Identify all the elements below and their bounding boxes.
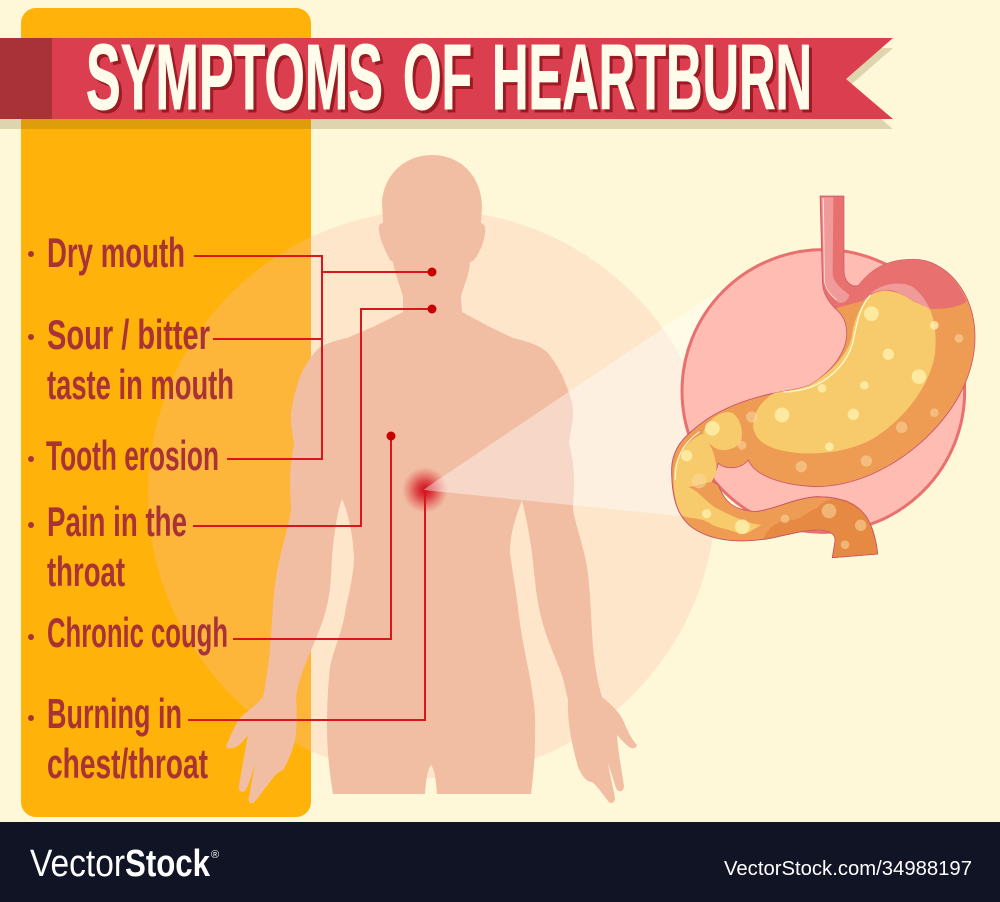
body silhouette: [226, 155, 637, 803]
label: sour bitter taste: [47, 311, 234, 408]
light beam from chest to stomach: [423, 290, 720, 520]
esophagus: [820, 196, 868, 308]
label: pain in the throat: Pain in the: [47, 498, 187, 545]
footer image id: VectorStock.com/34988197: [724, 858, 972, 880]
stomach top red section: [835, 259, 967, 309]
label: dry mouth: Dry mouth: [47, 229, 185, 276]
stomach outer body: [672, 259, 975, 558]
footer logo: Vector: [30, 843, 125, 885]
ribbon band: [0, 38, 893, 119]
marker dots: [386, 268, 436, 440]
title: OF: [403, 25, 472, 129]
outline redraw for intestine: [672, 393, 878, 558]
footer bar: [0, 822, 1000, 902]
label: tooth erosion: Tooth erosion: [46, 432, 219, 479]
duodenum acid: [674, 433, 762, 534]
bubbles: [681, 306, 939, 534]
esophagus white line: [823, 198, 837, 300]
panel: orange symptoms column: [21, 8, 311, 817]
line: burning in chest: [188, 490, 425, 720]
label: burning in chest/throat: chest/throat: [47, 740, 208, 787]
mucosa highlight: [783, 295, 871, 392]
darker intestine end: [763, 499, 878, 558]
label: chronic cough: Chronic cough: [47, 609, 228, 656]
label: pain in the throat: [47, 498, 187, 595]
label: pain in the throat: throat: [47, 548, 125, 595]
label: burning in chest/throat: Burning in: [47, 690, 182, 737]
enlarged circle behind stomach: [682, 250, 965, 532]
line: dry mouth, sour taste, tooth erosion to mouth: [194, 256, 432, 459]
esophagus highlight: [821, 197, 849, 303]
ribbon drop shadow: [0, 48, 893, 129]
label: sour bitter taste: Sour / bitter: [47, 311, 210, 358]
footer logo: [30, 843, 219, 885]
line: chronic cough: [233, 436, 391, 639]
pylorus acid: [703, 412, 742, 450]
line: pain in the throat: [193, 309, 432, 526]
stomach illustration: [672, 196, 975, 558]
footer logo: Stock: [125, 843, 211, 885]
label: sour bitter taste: taste in mouth: [47, 361, 234, 408]
pain glow on chest: [402, 467, 448, 513]
label: burning in chest/throat: [47, 690, 208, 787]
pink overlap at top of acid: [870, 284, 929, 308]
acid pool: [753, 291, 936, 453]
title ribbon: [0, 25, 893, 129]
symptom list: [28, 229, 234, 787]
background circle: [148, 210, 716, 778]
white intestine highlight: [675, 432, 699, 480]
esophagus lower highlight over join: [837, 293, 849, 303]
ribbon fold: [0, 38, 52, 119]
bullets: [28, 251, 34, 721]
leader lines: [188, 256, 436, 720]
gap under duodenum: [719, 488, 750, 512]
footer logo: ®: [211, 849, 219, 861]
